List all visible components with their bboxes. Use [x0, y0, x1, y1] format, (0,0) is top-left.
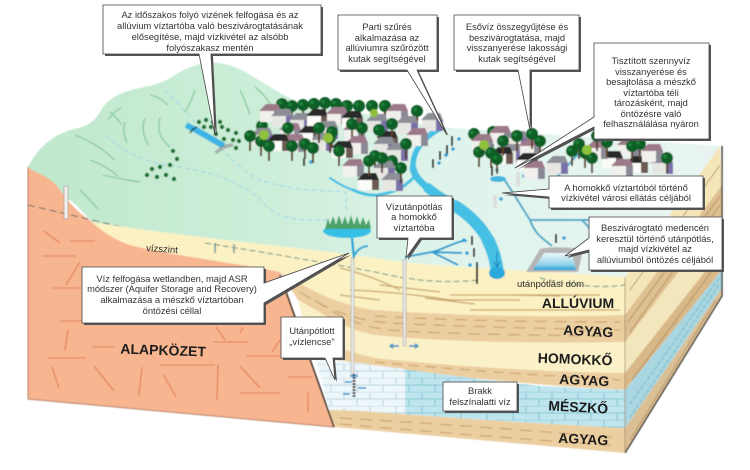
callout: utánpótlott vízlencse	[281, 317, 345, 382]
callout: víz felfogása wetlandben: öntözési céllal	[143, 306, 201, 316]
callout: homokkő vízkivétel: A homokkő víztartóból történő	[564, 183, 688, 193]
callout: tisztított szennyvíz: öntözésre való	[621, 109, 681, 119]
panel: right side face	[625, 146, 722, 453]
callout: időszakos folyó: folyószakasz mentén	[166, 43, 254, 53]
label: homokkő: HOMOKKŐ	[538, 349, 613, 368]
village left	[244, 97, 443, 191]
village middle	[468, 126, 568, 179]
callout: esővíz: beszivárogtatása, majd	[469, 33, 565, 43]
label: allúvium: ALLÚVIUM	[542, 294, 614, 311]
panel: alapkőzet bedrock	[28, 167, 334, 427]
callout: esővíz: Esővíz összegyűjtése és	[466, 22, 568, 32]
infiltration basin	[526, 247, 582, 272]
callout: időszakos folyó: allúvium víztartóba való beszivárogtatásának	[117, 21, 303, 31]
wetland	[323, 215, 371, 258]
callout: vízutánpótlás: Vízutánpótlás	[386, 202, 443, 212]
label: agyag 3: AGYAG	[558, 430, 609, 448]
callout: parti szűrés	[338, 15, 449, 137]
panel: mészkő limestone layer	[316, 358, 625, 428]
label: vízszint: vízszint	[146, 243, 179, 256]
callout: tisztított szennyvíz: visszanyerése és	[615, 67, 687, 77]
seasonal stream dashed	[105, 90, 350, 222]
panel: agyag clay layer 2	[308, 340, 625, 390]
hill strokes	[75, 87, 272, 209]
callout: beszivárogtató medence	[565, 217, 724, 272]
seasonal reservoir with check dams	[186, 125, 233, 153]
alluvium lenses	[340, 268, 620, 310]
panel: alluvium layer	[92, 222, 625, 316]
village right	[566, 130, 673, 177]
block diagram artwork	[28, 63, 722, 453]
callout: esővíz: kutak segítségével	[478, 54, 556, 64]
callout: esővíz: visszanyerése lakossági	[467, 43, 567, 53]
callout: parti szűrés: allúviumra szűrözött	[345, 43, 429, 53]
callout: vízutánpótlás: a homokkő	[391, 212, 437, 222]
panel: agyag clay layer 1	[280, 272, 625, 343]
production wells	[303, 136, 566, 284]
callout: homokkő vízkivétel: vízkivétel városi ellátás céljából	[561, 193, 691, 203]
callout: tisztított szennyvíz: víztartóba téli	[623, 88, 679, 98]
fault line	[280, 275, 334, 427]
callout: beszivárogtató medence: allúviumból öntözés céljából	[597, 255, 713, 265]
callout: tisztított szennyvíz: Tisztított szennyvíz	[611, 56, 691, 66]
panel: homokkő sandstone layer	[298, 300, 625, 373]
callout: parti szűrés: Parti szűrés	[362, 22, 412, 32]
panel: ground surface and hills	[28, 63, 720, 277]
callout: brakk felszín alatti víz	[443, 382, 519, 413]
label: agyag 1: AGYAG	[563, 322, 614, 340]
callout: utánpótlott vízlencse: Utánpótlott	[289, 326, 335, 336]
panel: agyag clay layer 3	[329, 410, 625, 453]
river	[330, 128, 505, 279]
callout: víz felfogása wetlandben: Víz felfogása wetlandben, majd ASR	[96, 274, 248, 284]
callout: vízutánpótlás: víztartóba	[393, 223, 435, 233]
injection wells	[343, 258, 419, 397]
callout: tisztított szennyvíz	[515, 43, 711, 170]
callout: tisztított szennyvíz: felhasználálása nyáron	[603, 119, 699, 129]
callout: tisztított szennyvíz: tározásként, majd	[614, 98, 688, 108]
callout: tisztított szennyvíz: besajtolása a mészkő	[606, 77, 696, 87]
water table dashed line	[205, 243, 625, 286]
label: utánpótlási dóm: utánpótlási dóm	[517, 279, 584, 290]
callout: beszivárogtató medence: majd vízkivétel az	[618, 244, 692, 254]
recharge plants dots	[145, 118, 241, 181]
callout: beszivárogtató medence: keresztül történő utánpótlás,	[596, 234, 714, 244]
callout: időszakos folyó: elősegítése, majd vízkivétel az alsóbb	[132, 32, 288, 42]
label: alapkőzet: ALAPKÖZET	[120, 341, 207, 360]
callout: brakk felszín alatti víz: felszínalatti víz	[449, 397, 511, 407]
callout: vízutánpótlás	[377, 196, 454, 260]
callout: brakk felszín alatti víz: Brakk	[468, 386, 492, 396]
label: mészkő: MÉSZKŐ	[548, 396, 609, 417]
callout: homokkő vízkivétel	[502, 176, 705, 210]
label: agyag 2: AGYAG	[559, 371, 610, 389]
callout: víz felfogása wetlandben: módszer (Aquifer Storage and Recovery)	[87, 284, 257, 294]
callout: parti szűrés: kutak segítségével	[348, 54, 426, 64]
callout: parti szűrés: alkalmazása az	[355, 33, 420, 43]
callout: időszakos folyó	[103, 5, 323, 137]
callout: víz felfogása wetlandben: alkalmazása a mészkő víztartóban	[100, 295, 244, 305]
recharge pond	[490, 176, 506, 182]
callout: utánpótlott vízlencse: „vízlencse"	[289, 337, 335, 347]
callout: beszivárogtató medence: Beszivárogtató medencén	[601, 223, 709, 233]
callout: víz felfogása wetlandben	[82, 253, 351, 325]
recharge canals	[405, 150, 612, 265]
callout: időszakos folyó: Az időszakos folyó vizének felfogása és az	[121, 10, 299, 20]
callout: esővíz	[454, 15, 581, 132]
